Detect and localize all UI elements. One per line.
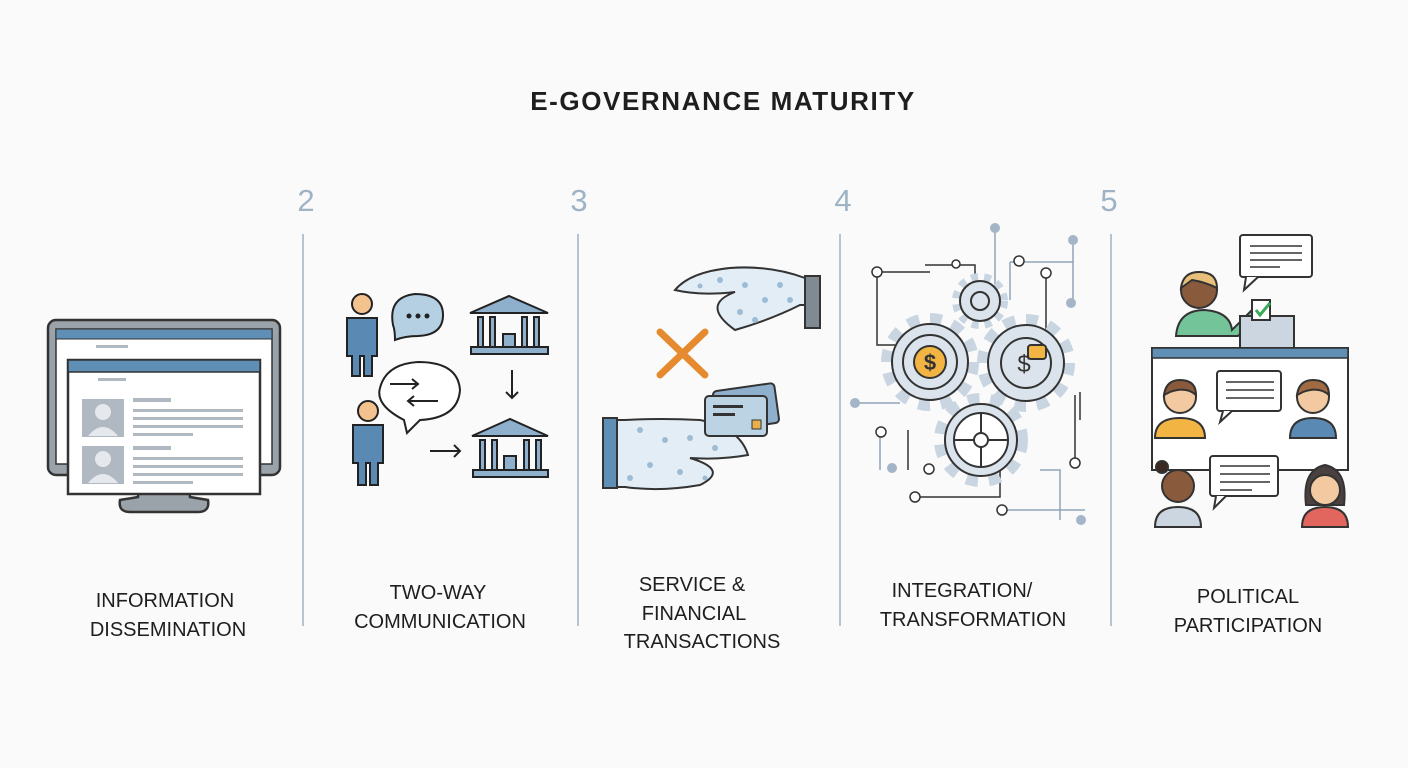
labels: INTEGRATION/: [892, 580, 1033, 602]
step numbers: 5: [1100, 183, 1118, 218]
labels: [90, 574, 1322, 653]
gear 1: $: [924, 350, 936, 375]
gear 2: [982, 319, 1070, 407]
step numbers: 2: [297, 183, 315, 218]
gear 4: [939, 398, 1023, 482]
labels: FINANCIAL: [642, 603, 746, 625]
labels: SERVICE &: [639, 574, 746, 596]
gear 3 small: [956, 277, 1004, 325]
labels: COMMUNICATION: [354, 611, 526, 633]
icon: computer monitor: [48, 320, 280, 512]
gear 1: [886, 318, 974, 406]
title: E-GOVERNANCE MATURITY: [530, 86, 916, 116]
step numbers: 3: [570, 183, 588, 218]
icon: integration gears with circuit: [850, 223, 1086, 525]
labels: TWO-WAY: [390, 582, 486, 604]
step numbers: [297, 183, 1118, 218]
gear 2: $: [1017, 351, 1031, 378]
icon: political participation: [1152, 235, 1348, 527]
labels: INFORMATION: [96, 590, 234, 612]
labels: TRANSACTIONS: [624, 631, 780, 653]
labels: POLITICAL: [1197, 586, 1299, 608]
step numbers: 4: [834, 183, 852, 218]
labels: DISSEMINATION: [90, 619, 246, 641]
icon: digital hands with card and tools: [603, 267, 820, 489]
icon: two-way communication: [347, 294, 548, 485]
labels: PARTICIPATION: [1174, 615, 1322, 637]
labels: TRANSFORMATION: [880, 609, 1066, 631]
